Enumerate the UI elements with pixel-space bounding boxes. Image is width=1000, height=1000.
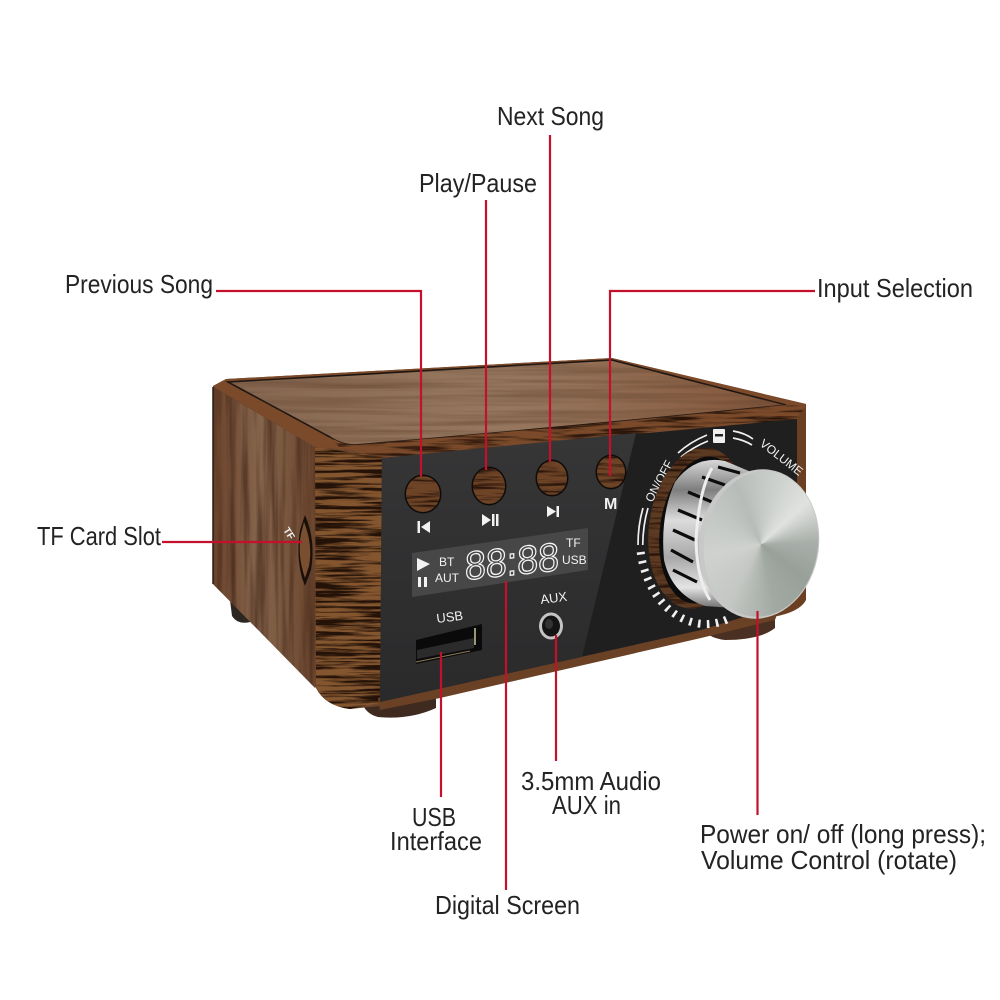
callout: Power and Volume — [700, 611, 986, 875]
callout: Next Song: Next Song — [497, 101, 604, 131]
callout: Input Selection — [610, 273, 973, 476]
top front edge band — [330, 405, 806, 458]
digital screen: BT — [439, 555, 455, 569]
front left corner strip — [315, 447, 382, 709]
callout: Play/Pause: Play/Pause — [419, 168, 537, 198]
callout: USB Interface: USB — [412, 802, 456, 832]
USB port — [416, 608, 482, 664]
callout: Power and Volume: Power on/ off (long press); — [700, 819, 986, 849]
right edge wood — [773, 406, 806, 617]
callout: USB Interface — [390, 652, 482, 856]
digital screen: 88:88 — [465, 535, 559, 589]
front left foot — [362, 692, 436, 718]
digital screen: USB — [562, 553, 587, 567]
body underlay — [213, 358, 806, 709]
button: play pause — [471, 466, 507, 526]
button: input selection — [596, 454, 626, 509]
volume dial markings: VOLUME — [757, 436, 806, 479]
digital screen: TF — [566, 536, 581, 550]
black front panel — [380, 419, 797, 702]
USB port: USB — [436, 608, 464, 626]
callout: Input Selection: Input Selection — [817, 273, 973, 303]
front right foot — [702, 612, 775, 640]
callout: USB Interface: Interface — [390, 826, 482, 856]
callout: 3.5mm Audio AUX in: 3.5mm Audio — [521, 766, 661, 796]
button: input selection: M — [604, 496, 617, 513]
callout: TF Card Slot: TF Card Slot — [37, 521, 162, 551]
callout: Previous Song — [65, 269, 421, 477]
callout: Previous Song: Previous Song — [65, 269, 213, 299]
knob outer rim — [689, 461, 829, 627]
back left foot — [230, 600, 252, 623]
button: next — [535, 459, 569, 517]
volume knob — [663, 460, 829, 627]
knob barrel — [663, 460, 770, 610]
TF card slot — [280, 515, 313, 586]
volume dial markings — [638, 429, 806, 624]
AUX jack — [539, 589, 568, 640]
knob brushed face — [694, 464, 828, 624]
wood ring around knob — [648, 448, 734, 608]
lower front edge band — [378, 606, 780, 710]
panel reflection — [380, 433, 636, 702]
TF card slot: TF — [280, 526, 296, 542]
volume dial markings: ON/OFF — [642, 458, 676, 504]
button: previous — [404, 474, 442, 533]
top face — [213, 355, 806, 450]
callout: Digital Screen: Digital Screen — [435, 890, 580, 920]
speaker device — [210, 355, 829, 718]
callout: 3.5mm Audio AUX in — [521, 635, 661, 820]
AUX jack: AUX — [540, 589, 568, 607]
digital screen: AUT — [435, 571, 460, 585]
digital screen — [412, 528, 588, 597]
callout: 3.5mm Audio AUX in: AUX in — [552, 790, 621, 820]
callout: Power and Volume: Volume Control (rotate) — [701, 845, 957, 875]
left side face — [210, 385, 320, 690]
